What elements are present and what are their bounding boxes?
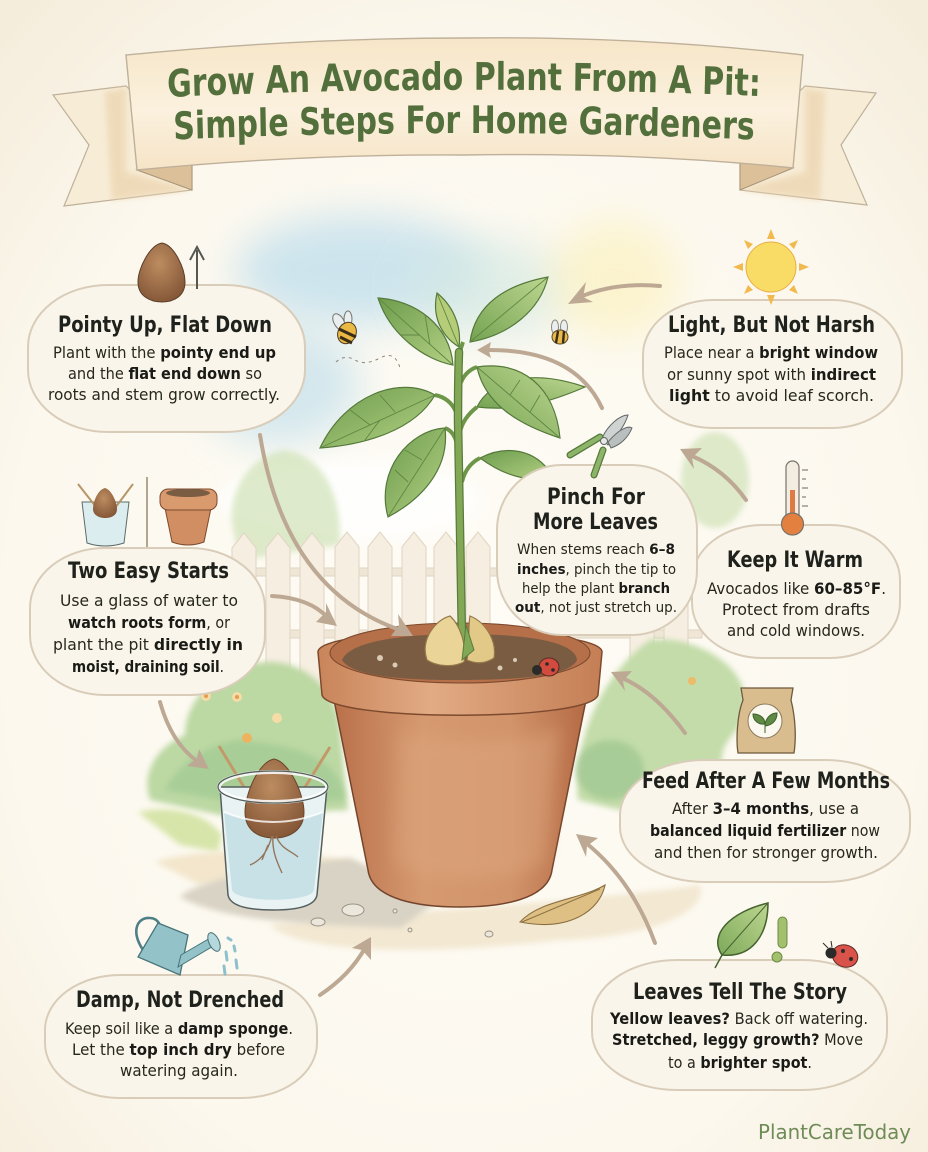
arrow: to glass: [160, 702, 209, 769]
arrow: pointy: [260, 435, 413, 636]
panel: light: [643, 300, 902, 428]
panel: two easy starts: [30, 548, 265, 695]
panel: pinch: [497, 465, 697, 635]
bee right: [552, 320, 568, 344]
bushes left: [138, 662, 348, 852]
icon: thermometer: [782, 461, 808, 535]
ground wash: [155, 851, 701, 950]
icon: pruners: [570, 415, 632, 475]
arrow: feed: [611, 671, 685, 733]
bushes right: [576, 639, 745, 810]
panel: feed: After 3–4 months, use a: [672, 799, 859, 818]
avocado plant: [320, 277, 585, 666]
panel: two easy starts: watch roots form, or: [68, 613, 230, 632]
panel: leaves tell the story: Leaves Tell The Story: [633, 980, 847, 1005]
panel: leaves tell the story: to a brighter spot.: [668, 1053, 812, 1072]
panel: damp not drenched: watering again.: [120, 1061, 238, 1080]
panel: damp not drenched: [45, 975, 317, 1098]
watercolor sky: [200, 215, 680, 540]
panel: pinch: inches, pinch the tip to: [517, 562, 676, 578]
arrow: warm: [680, 448, 746, 500]
arrow: pinch: [477, 342, 602, 408]
panel: keep it warm: Keep It Warm: [727, 548, 863, 573]
title ribbon: [52, 37, 877, 207]
panel: pointy up: roots and stem grow correctly.: [48, 385, 280, 404]
panel: keep it warm: and cold windows.: [727, 621, 865, 640]
panel: pointy up: and the flat end down so: [68, 364, 262, 383]
pebbles: [311, 904, 493, 937]
panel: pinch: help the plant branch: [522, 581, 670, 597]
panel: damp not drenched: Keep soil like a damp sponge.: [65, 1019, 293, 1038]
title text: Grow An Avocado Plant From A Pit:: [168, 60, 758, 97]
icon: watering can: [136, 918, 237, 975]
icon: pit with up arrow: [138, 243, 204, 302]
panel: light: light to avoid leaf scorch.: [669, 386, 874, 405]
brand label: PlantCareToday: [758, 1120, 911, 1144]
bee left: [330, 311, 400, 368]
icon: small glass: [78, 484, 133, 546]
arrow: two starts: [272, 596, 337, 626]
arrow: light: [568, 282, 660, 304]
title text: [168, 60, 758, 145]
panel: leaves tell the story: [592, 960, 887, 1090]
ladybug on pot: [532, 658, 559, 676]
panel: pinch: Pinch For: [547, 485, 645, 510]
panel: two easy starts: plant the pit directly in: [53, 635, 243, 654]
icon: ladybug: [823, 941, 861, 971]
arrow: damp: [320, 937, 371, 995]
arrow: leaves: [576, 834, 655, 943]
panel: light: or sunny spot with indirect: [667, 365, 876, 384]
panel: keep it warm: [692, 525, 900, 658]
panel: damp not drenched: Damp, Not Drenched: [76, 988, 284, 1013]
panel: feed: balanced liquid fertilizer now: [650, 821, 880, 840]
terracotta pot: [318, 623, 602, 907]
picket fence: [232, 532, 702, 692]
background trees: [232, 432, 749, 560]
panel: pointy up: Plant with the pointy end up: [53, 343, 276, 362]
panel: leaves tell the story: Stretched, leggy growth? Move: [612, 1030, 863, 1049]
panel: keep it warm: Protect from drafts: [722, 600, 870, 619]
panel: damp not drenched: Let the top inch dry before: [72, 1040, 285, 1059]
icon: small pot: [146, 477, 217, 547]
icon: fertilizer bag: [737, 688, 795, 753]
panel: two easy starts: Use a glass of water to: [60, 591, 238, 610]
icon: leaf with exclamation: [715, 903, 787, 968]
panel: two easy starts: moist, draining soil.: [72, 657, 224, 676]
panel: pointy up: Pointy Up, Flat Down: [58, 313, 272, 338]
icon: sun: [733, 229, 809, 305]
title text: Simple Steps For Home Gardeners: [175, 105, 754, 145]
panel: pointy up: [28, 285, 305, 432]
panel: feed: and then for stronger growth.: [654, 843, 878, 862]
panel: pinch: out, not just stretch up.: [515, 600, 677, 616]
dead leaf: [520, 885, 605, 924]
panel: feed: [620, 760, 910, 882]
panel: light: Place near a bright window: [664, 343, 878, 362]
panel: pinch: More Leaves: [533, 510, 658, 535]
panel: two easy starts: Two Easy Starts: [68, 559, 229, 584]
water glass with pit: [218, 746, 330, 910]
panel: light: Light, But Not Harsh: [668, 313, 875, 338]
panel: leaves tell the story: Yellow leaves? Back off watering.: [609, 1009, 868, 1028]
panel: keep it warm: Avocados like 60–85°F.: [707, 579, 886, 598]
panel: pinch: When stems reach 6–8: [517, 542, 675, 558]
